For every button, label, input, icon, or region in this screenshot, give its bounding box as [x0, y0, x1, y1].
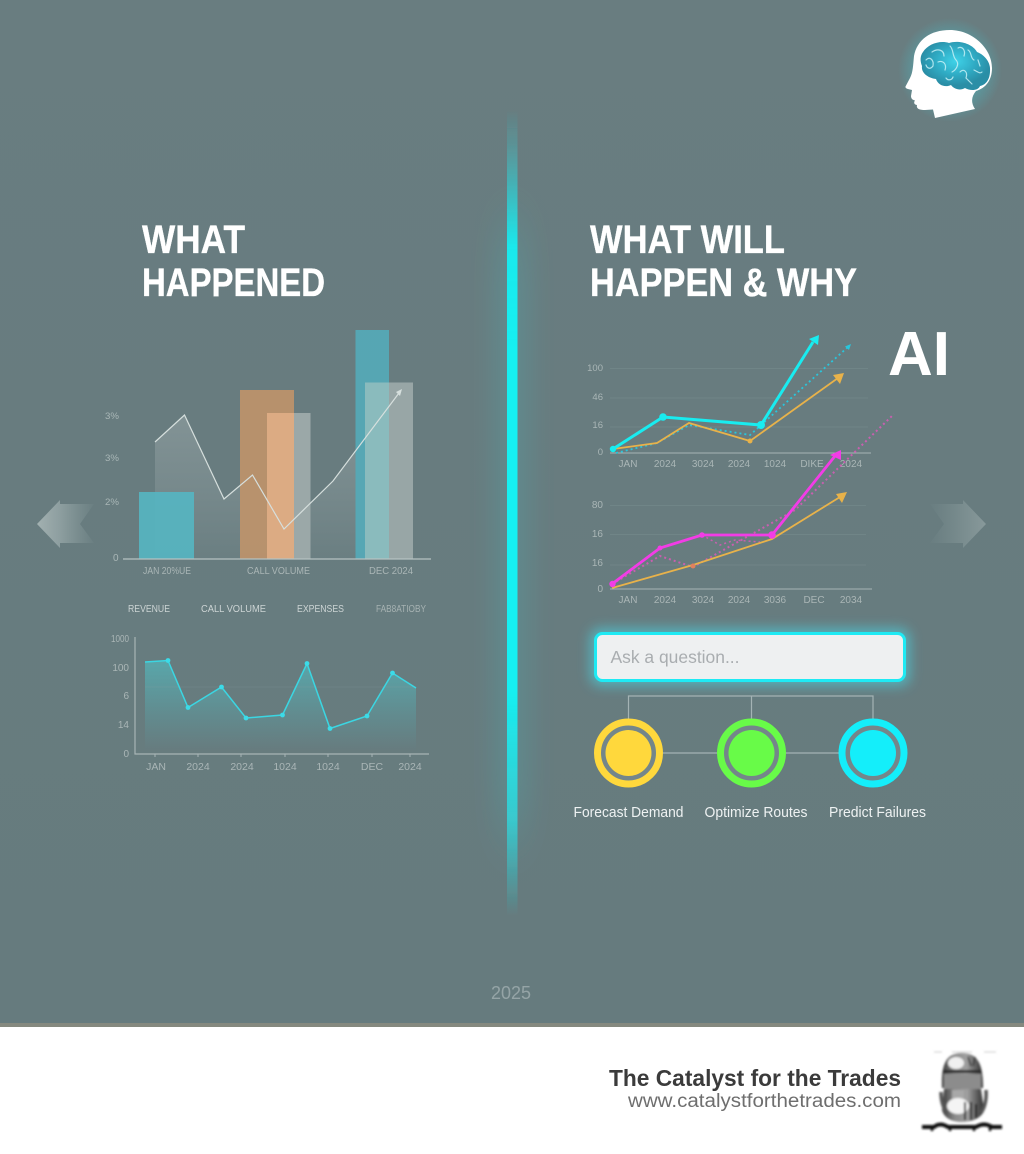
- node: predict failures: [829, 722, 926, 821]
- axis labels: 0: [598, 447, 603, 458]
- axis labels: 0: [113, 553, 119, 564]
- heading: what happened: HAPPENED: [142, 261, 325, 305]
- bar: call volume overlay: [267, 413, 310, 559]
- legend: bar chart categories: FAB8ATIOBY: [376, 603, 426, 615]
- axis labels: 16: [592, 558, 603, 569]
- x labels: DEC: [361, 761, 384, 773]
- y labels: 6: [123, 691, 129, 702]
- line area: [155, 390, 401, 559]
- line chart: forecast magenta: JAN: [619, 595, 637, 606]
- legend: bar chart categories: REVENUE: [128, 603, 170, 615]
- bar chart: historical bars and line: JAN 20%UE: [143, 565, 191, 577]
- axis labels: 80: [592, 500, 603, 511]
- heading: what will happen and why: [590, 218, 857, 305]
- axis labels: 100: [587, 363, 603, 374]
- bar: december overlay: [365, 382, 413, 559]
- magenta series: [612, 456, 835, 584]
- icon: podcast microphone: [922, 1052, 1002, 1131]
- y labels: 1000: [111, 634, 129, 645]
- axis labels: [592, 500, 603, 595]
- y labels: [111, 634, 129, 760]
- footer band: [0, 1027, 1024, 1154]
- line chart: forecast magenta: 3024: [692, 595, 715, 606]
- axis labels: [105, 411, 119, 564]
- x labels: JAN: [146, 761, 166, 773]
- data line: [145, 660, 416, 728]
- axis labels: 2%: [105, 497, 119, 507]
- footer url: www.catalystforthetrades.com: [627, 1091, 901, 1112]
- legend: bar chart categories: EXPENSES: [297, 603, 344, 615]
- x labels: [146, 761, 422, 773]
- y labels: 100: [112, 663, 129, 674]
- bar: call volume orange: [240, 390, 294, 559]
- head: [942, 1053, 983, 1088]
- legend: bar chart categories: [128, 603, 426, 615]
- y labels: 14: [118, 720, 129, 731]
- heading: what happened: [142, 218, 325, 305]
- area chart: historical trend: [111, 634, 429, 773]
- connector lines: [628, 696, 873, 753]
- legend: bar chart categories: CALL VOLUME: [201, 603, 266, 615]
- axis labels: 16: [592, 420, 603, 431]
- node: forecast demand: Forecast Demand: [574, 805, 684, 821]
- axes: [135, 637, 429, 754]
- line chart: forecast cyan: 2024: [728, 459, 751, 470]
- bar: tall teal: [356, 330, 389, 559]
- base: [922, 1124, 1002, 1127]
- heading: what will happen and why: WHAT WILL: [590, 218, 785, 262]
- axis labels: 16: [592, 529, 603, 540]
- arrow: right: [930, 500, 986, 548]
- heading: what happened: WHAT: [142, 218, 245, 262]
- bar chart: historical bars and line: [105, 330, 431, 577]
- line chart: forecast magenta: [592, 414, 894, 606]
- icon: AI brain in head: [898, 18, 1002, 122]
- search box: ask a question: [590, 628, 910, 686]
- dotted trend: [612, 414, 894, 584]
- line chart: forecast cyan: 2024: [840, 459, 863, 470]
- axis labels: 3%: [105, 453, 119, 463]
- axis labels: 3%: [105, 411, 119, 421]
- year label: 2025: [491, 983, 531, 1003]
- axis: [123, 558, 431, 560]
- footer title: The Catalyst for the Trades: [609, 1065, 901, 1091]
- line chart: forecast magenta: 2024: [654, 595, 677, 606]
- body: [942, 1089, 984, 1122]
- arrow: left: [37, 500, 94, 548]
- axis labels: [587, 363, 603, 458]
- axis labels: 46: [592, 392, 603, 403]
- line chart: forecast cyan: 1024: [764, 459, 787, 470]
- line chart: forecast magenta: 2024: [728, 595, 751, 606]
- central glowing divider: [497, 110, 527, 915]
- axis labels: 0: [597, 584, 603, 595]
- bar chart: historical bars and line: DEC 2024: [369, 565, 413, 577]
- search box: ask a question: Ask a question...: [610, 647, 740, 667]
- x labels: 1024: [273, 761, 297, 773]
- node: optimize routes: Optimize Routes: [704, 805, 808, 821]
- line chart: forecast magenta: DEC: [803, 595, 825, 606]
- line chart: forecast cyan: 3024: [692, 459, 715, 470]
- y labels: 0: [123, 749, 129, 760]
- cyan series: [613, 342, 813, 449]
- line chart: forecast magenta: 3036: [764, 595, 787, 606]
- trend line: [155, 393, 399, 529]
- line chart: forecast cyan: JAN: [619, 459, 637, 470]
- bar: revenue teal: [139, 492, 194, 559]
- side arms: [941, 1090, 986, 1113]
- data points: [166, 658, 395, 731]
- orange series: [612, 497, 840, 588]
- x labels: 2024: [230, 761, 254, 773]
- label: AI: AI: [888, 320, 950, 389]
- x labels: 2024: [186, 761, 210, 773]
- line chart: forecast cyan: [587, 335, 871, 470]
- dotted forecast: [616, 347, 848, 453]
- node: predict failures: Predict Failures: [829, 805, 926, 821]
- bar chart: historical bars and line: CALL VOLUME: [247, 565, 310, 577]
- orange series: [613, 378, 838, 449]
- x labels: 2024: [398, 761, 422, 773]
- heading: what will happen and why: HAPPEN & WHY: [590, 261, 857, 305]
- node: optimize routes: [704, 722, 808, 821]
- line chart: forecast cyan: 2024: [654, 459, 677, 470]
- x labels: 1024: [316, 761, 340, 773]
- line chart: forecast magenta: 2034: [840, 595, 863, 606]
- line chart: forecast cyan: DIKE: [800, 459, 824, 470]
- node: forecast demand: [574, 722, 684, 821]
